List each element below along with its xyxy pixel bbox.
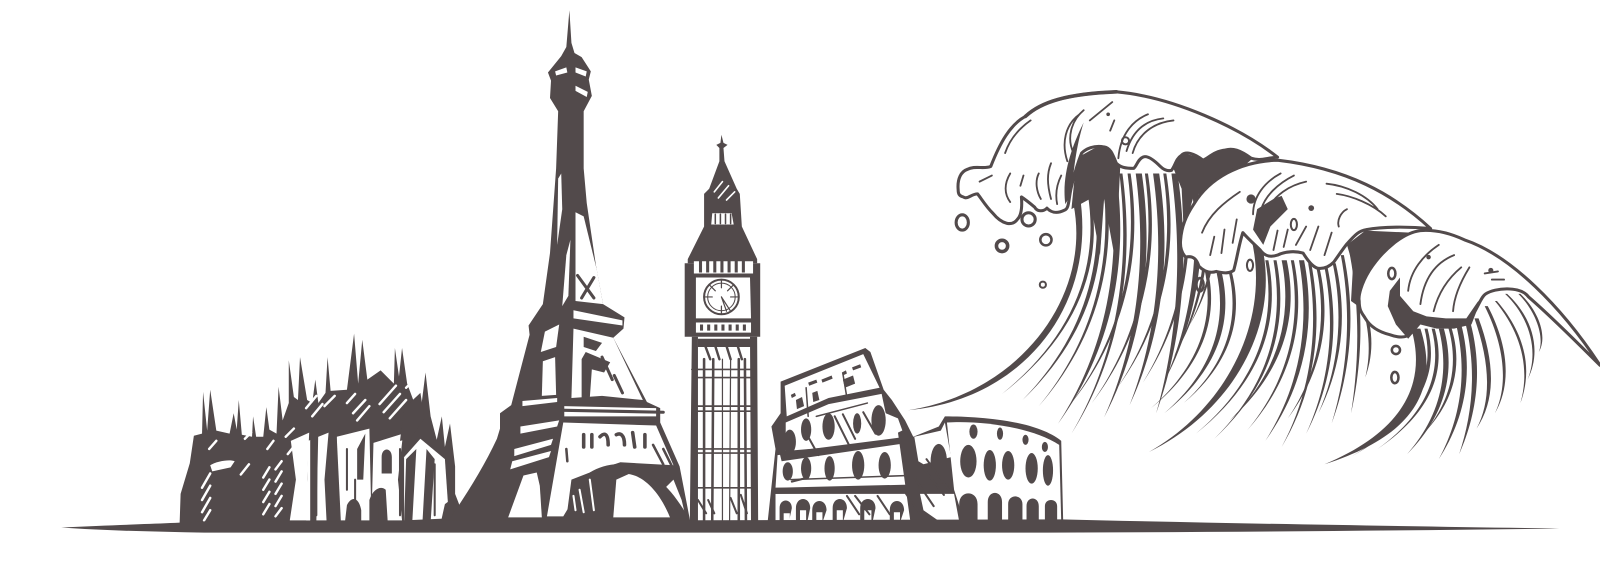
wave 1 bubbles [956,112,1129,288]
wave 3 bubbles [1388,255,1493,383]
Big Ben clock tower [685,135,760,524]
wave 2 backing [1149,223,1429,452]
wave 1 curl stripes [908,143,1255,434]
clock face [704,280,739,314]
Colosseum [767,348,1063,524]
wave 2 foam crest [1180,160,1431,273]
ground line [61,519,1559,533]
Eiffel Tower [446,10,691,524]
wave 2 [1149,160,1431,452]
wave 2 curl stripes [1149,223,1410,452]
wave 1 [908,92,1278,434]
wave 3 curl stripes [1324,294,1542,464]
cathedral [180,334,460,524]
wave 3 [1324,230,1600,464]
wave 3 backing [1324,296,1600,464]
wave 1 foam crest [958,92,1278,224]
wave 2 bubbles [1196,194,1314,291]
wave 3 foam crest [1359,230,1600,365]
